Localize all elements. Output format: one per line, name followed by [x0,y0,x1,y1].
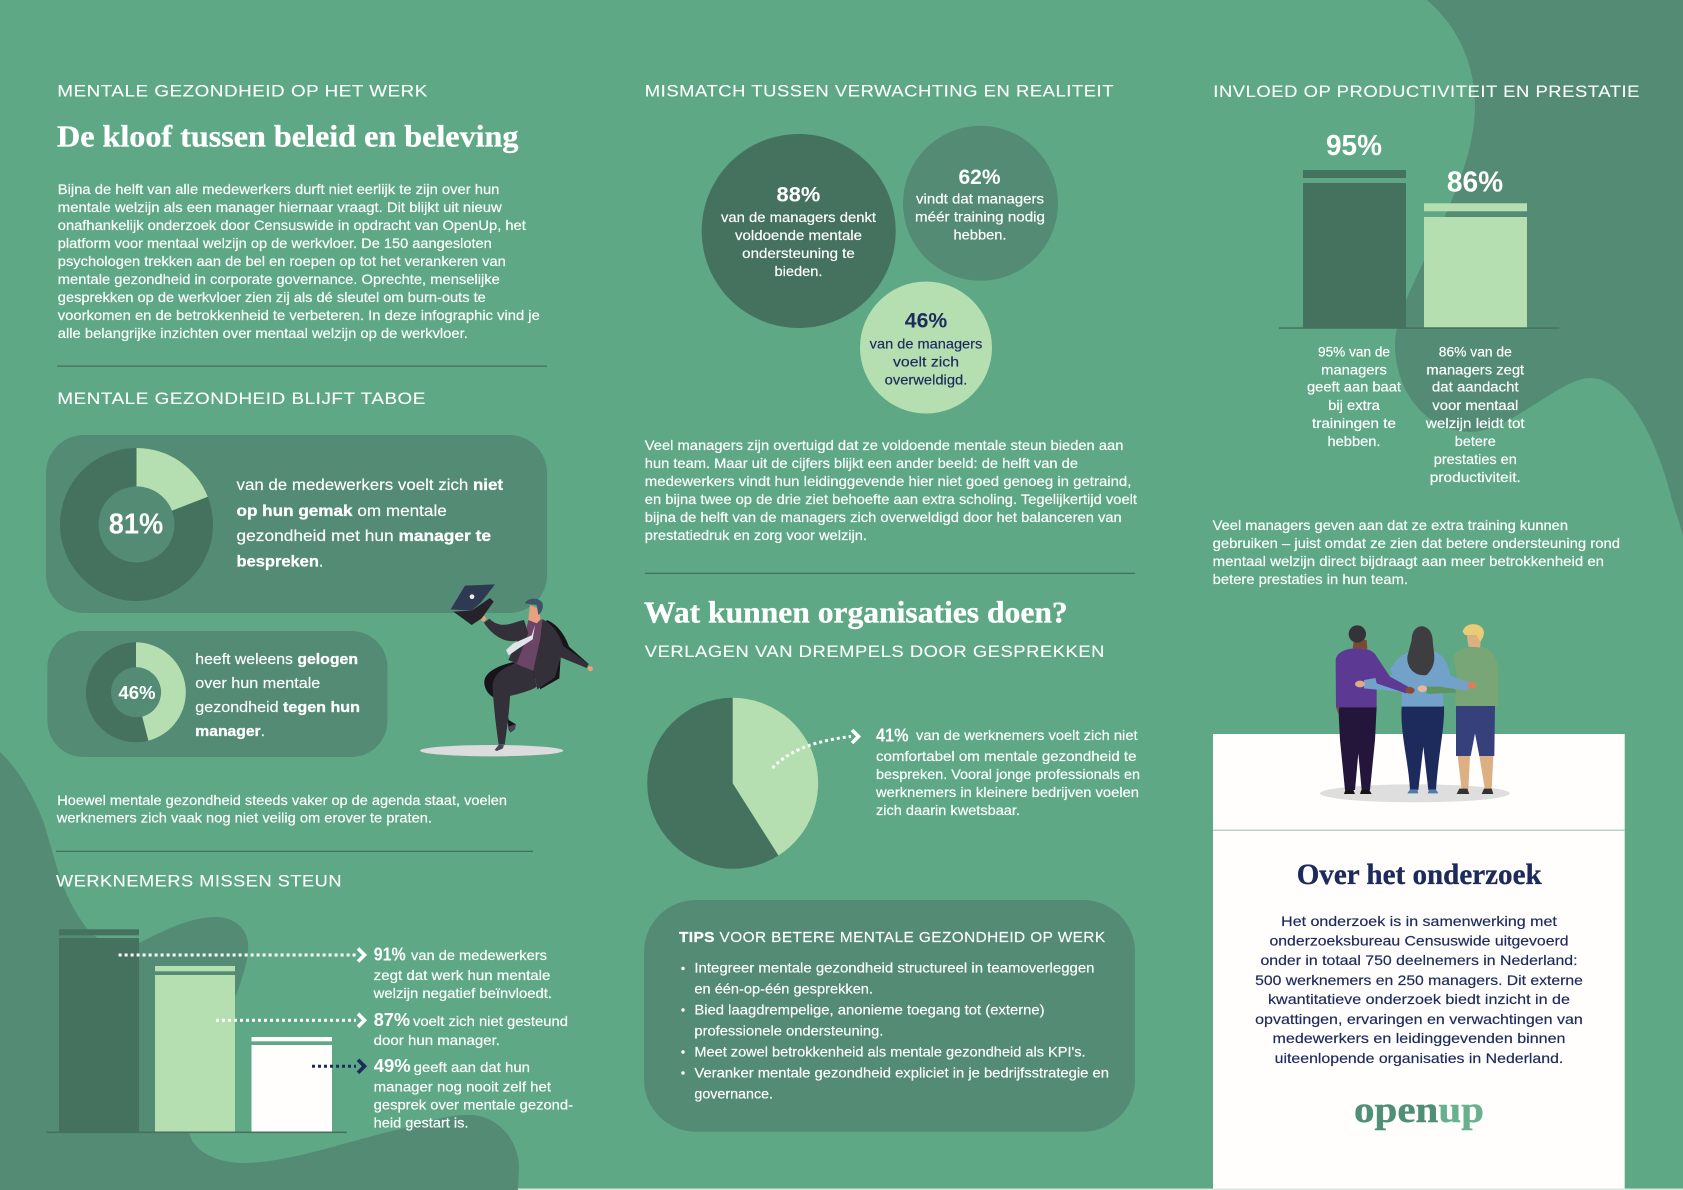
caption: 95%: bij extra [1328,398,1380,413]
81% description: bespreken. [236,554,324,571]
arrow: 91% [119,948,364,962]
bubble: 46% [860,282,992,414]
bar chart: managers [1279,130,1559,329]
81% description: gezondheid met hun manager te [236,528,491,545]
bar chart: werknemers [47,929,347,1133]
bar 87% [155,966,235,1132]
tips heading: TIPS VOOR BETERE MENTALE GEZONDHEID OP WERK [679,930,1106,946]
donut chart 81% [60,448,213,601]
bubble: 46%: van de managers [870,336,982,351]
stat text: 87% [374,1009,568,1048]
bubble: 88% [702,134,896,328]
caption: 86%: prestaties en [1434,452,1517,467]
intro paragraph: gesprekken op de werkvloer zien zij als dé sleutel om burn-outs te [58,290,486,305]
heading: invloed: INVLOED OP PRODUCTIVITEIT EN PRESTATIE [1213,82,1640,101]
stat text: 91% [373,944,552,1001]
caption: 86%: 86% van de [1439,345,1512,360]
bar 86% [1424,167,1527,328]
caption: 95%: managers [1321,363,1387,378]
caption: 86%: managers zegt [1426,363,1524,378]
colleague: middle [1390,626,1450,793]
81% description [236,477,504,571]
stat text: 41%: van de werknemers voelt zich niet [916,728,1138,743]
bubble: 62% [903,126,1058,281]
46% description: manager. [195,723,265,740]
bubble: 46%: overweldigd. [885,372,967,387]
heading: taboe: MENTALE GEZONDHEID BLIJFT TABOE [57,389,426,408]
illustration: three colleagues [1320,624,1510,802]
stat text: 49% [374,1055,573,1130]
heading: over het onderzoek: Over het onderzoek [1297,858,1542,891]
bubble: 46%: voelt zich [893,354,959,369]
heading: verlagen van drempels: VERLAGEN VAN DREMPELS DOOR GESPREKKEN [645,642,1105,661]
stat text: 91%: zegt dat werk hun mentale [374,968,551,983]
paragraph: managers overtuigd: hun team. Maar uit de cijfers blijkt een ander beeld: de helft van de [645,456,1078,471]
tips list: professionele ondersteuning. [694,1023,883,1038]
tips list [681,961,1109,1101]
caption: 86%: dat aandacht [1432,380,1519,395]
bar 86%: 86% [1447,167,1503,199]
background blob: top right [1395,0,1683,535]
stat text: 49%: manager nog nooit zelf het [374,1080,551,1095]
arrow: 87% [216,1014,364,1027]
stat text: 91%: welzijn negatief beïnvloedt. [373,986,552,1001]
donut chart 46%: 46% [118,683,156,703]
tips list: Integreer mentale gezondheid structureel in teamoverleggen [694,961,1094,976]
stat text: 91%: van de medewerkers [411,948,547,963]
tips list: Meet zowel betrokkenheid als mentale gezondheid als KPI's. [694,1044,1086,1059]
background blob: bottom left [0,752,519,1190]
paragraph: managers overtuigd: en bijna twee op de drie ziet behoefte aan extra scholing. Tegelijkertijd voelt [645,492,1137,507]
tips list: Veranker mentale gezondheid expliciet in je bedrijfsstrategie en [694,1065,1109,1080]
46% description: heeft weleens gelogen [195,651,358,668]
bubble: 88%: van de managers denkt [721,210,876,225]
intro paragraph: alle belangrijke inzichten over mentaal welzijn op de werkvloer. [58,326,468,341]
bar 95%: 95% [1326,130,1382,162]
panel: over het onderzoek [1213,734,1625,1188]
intro paragraph: mentale gezondheid in corporate governance. Oprechte, menselijke [58,272,500,287]
stat text: 41%: bespreken. Vooral jonge professionals en [876,767,1140,782]
linked arms [1355,652,1476,694]
onderzoek description: kwantitatieve onderzoek biedt inzicht in de [1268,992,1570,1007]
stat text: 87%: door hun manager. [374,1033,500,1048]
caption: 86%: productiviteit. [1430,470,1521,485]
tips list: Bied laagdrempelige, anonieme toegang tot (externe) [694,1002,1045,1017]
colleague: left [1336,625,1377,794]
caption: 86% [1425,345,1525,485]
panel: 46% stat [47,631,387,757]
intro eyebrow heading: MENTALE GEZONDHEID OP HET WERK [57,82,428,101]
colleague: right [1453,624,1498,794]
arrow: 41% [772,730,858,768]
illustration: businessman with laptop [420,584,593,756]
stat text: 91%: 91% [374,944,406,965]
stat text: 41%: 41% [876,725,909,746]
heading: werknemers missen steun: WERKNEMERS MISSEN STEUN [56,872,342,891]
paragraph: managers overtuigd: medewerkers vindt hun leidinggevende hier niet goed genoeg in getraind, [645,474,1131,489]
bubble: 46%: 46% [905,309,948,332]
title: wat kunnen organisaties doen: Wat kunnen organisaties doen? [644,594,1068,630]
intro paragraph: onafhankelijk onderzoek door Censuswide in opdracht van OpenUp, het [58,218,526,233]
bubble: 88%: 88% [777,184,821,207]
caption: 95%: 95% van de [1318,345,1390,360]
bottom edge strip [518,1188,1683,1190]
81% description: op hun gemak om mentale [236,503,447,520]
bar 91% [59,929,139,1132]
46% description [195,651,360,740]
donut chart 81%: 81% [109,508,163,540]
paragraph: managers training: gebruiken – juist omdat ze zien dat betere ondersteuning rond [1213,536,1620,551]
onderzoek description: medewerkers en leidinggevenden binnen [1272,1031,1566,1046]
stat text: 49%: 49% [374,1055,411,1076]
bubble: 88%: bieden. [774,264,822,279]
46% description: gezondheid tegen hun [195,699,360,716]
logo: openup: openup [1354,1090,1484,1131]
panel: 81% stat [46,435,547,613]
onderzoek description: uiteenlopende organisaties in Nederland. [1275,1051,1563,1066]
tips list: governance. [694,1086,773,1101]
81% description: van de medewerkers voelt zich niet [236,477,504,494]
stat text: 41% [875,725,1140,818]
stat text: 49%: gesprek over mentale gezond- [374,1098,573,1112]
intro paragraph: Bijna de helft van alle medewerkers durft niet eerlijk te zijn over hun [58,182,499,197]
stat text: 41%: zich daarin kwetsbaar. [876,803,1020,818]
stat text: 87%: voelt zich niet gesteund [413,1014,568,1029]
46% description: over hun mentale [195,675,320,692]
onderzoek description: onder in totaal 750 deelnemers in Nederland: [1260,953,1578,968]
stat text: 41%: comfortabel om mentale gezondheid te [876,749,1137,764]
onderzoek description: Het onderzoek is in samenwerking met [1281,914,1557,929]
onderzoek description: 500 werknemers en 250 managers. Dit externe [1255,973,1583,988]
donut chart 46% [86,642,186,742]
caption: 95%: hebben. [1328,434,1380,449]
paragraph: managers overtuigd: prestatiedruk en zorg voor welzijn. [645,528,867,543]
caption: 86%: betere [1455,434,1496,449]
paragraph: managers training: mentaal welzijn direct bijdraagt aan meer betrokkenheid en [1213,554,1604,569]
stat text: 49%: geeft aan dat hun [414,1060,530,1075]
paragraph: veilig praten [56,793,507,826]
intro paragraph [58,182,540,341]
onderzoek description [1255,914,1583,1066]
paragraph: veilig praten: werknemers zich vaak nog niet veilig om erover te praten. [56,811,432,826]
bubble: 62%: vindt dat managers [916,191,1044,206]
onderzoek description: onderzoeksbureau Censuswide uitgevoerd [1270,934,1568,949]
paragraph: veilig praten: Hoewel mentale gezondheid steeds vaker op de agenda staat, voelen [57,793,507,808]
stat text: 87%: 87% [374,1009,410,1030]
paragraph: managers training: betere prestaties in hun team. [1213,572,1408,587]
intro paragraph: voorkomen en de betrokkenheid te verbeteren. In deze infographic vind je [58,308,540,323]
caption: 86%: welzijn leidt tot [1425,416,1525,431]
bubble: 62%: 62% [958,166,1001,189]
bubble: 88%: voldoende mentale [735,228,862,243]
caption: 95%: trainingen te [1312,416,1396,431]
paragraph: managers overtuigd: bijna de helft van de managers zich overweldigd door het balanceren van [645,510,1122,525]
stat text: 49%: heid gestart is. [374,1116,468,1130]
intro paragraph: psychologen trekken aan de bel en roepen op tot het verankeren van [58,254,506,269]
arrow: 49% [312,1060,364,1073]
caption: 95% [1307,345,1401,449]
caption: 86%: voor mentaal [1432,398,1518,413]
paragraph: managers training: Veel managers geven aan dat ze extra training kunnen [1213,518,1568,533]
caption: 95%: geeft aan baat [1307,380,1401,395]
intro paragraph: mentale welzijn als een manager hiernaar vraagt. Dit blijkt uit nieuw [58,200,502,215]
intro paragraph: platform voor mentaal welzijn op de werkvloer. De 150 aangesloten [58,236,492,251]
paragraph: managers overtuigd: Veel managers zijn overtuigd dat ze voldoende mentale steun bieden aan [645,438,1123,453]
section: intro [57,82,540,341]
bubble: 88%: ondersteuning te [742,246,855,261]
onderzoek description: opvattingen, ervaringen en verwachtingen van [1255,1012,1583,1027]
main title: De kloof tussen beleid en beleving [57,118,519,154]
paragraph: managers training [1213,518,1620,587]
stat text: 41%: werknemers in kleinere bedrijven voelen [875,785,1139,800]
tips list: en één-op-één gesprekken. [694,981,873,996]
bar 95% [1303,130,1406,328]
bubble: 62%: méér training nodig [915,209,1045,224]
pie chart 41% [647,698,818,869]
panel: tips [644,900,1135,1132]
bar 49% [252,1037,332,1132]
paragraph: managers overtuigd [645,438,1137,543]
heading: mismatch: MISMATCH TUSSEN VERWACHTING EN REALITEIT [645,82,1114,101]
bubble: 62%: hebben. [954,227,1006,242]
